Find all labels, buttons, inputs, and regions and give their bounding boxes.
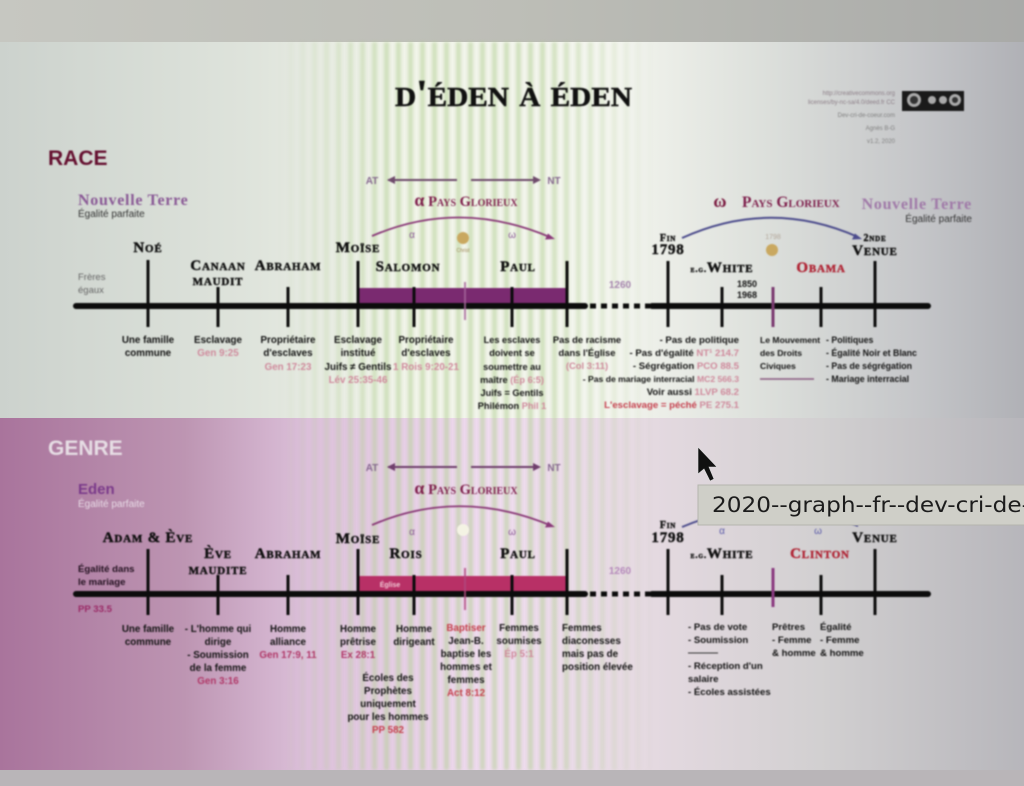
labels under timeline, left: soumises (496, 636, 542, 647)
labels under timeline, left (122, 334, 621, 411)
arrows: AT and NT: AT (366, 176, 378, 187)
labels under timeline, right (688, 621, 864, 698)
tooltip: 2020--graph--fr--dev-cri-de- (712, 493, 1024, 517)
timeline names: Paul (500, 546, 536, 562)
arc: alpha to omega: α (409, 230, 415, 241)
labels under timeline, right: des Droits (760, 348, 802, 358)
credits block: v1.2, 2020 (867, 139, 896, 145)
credits block: Dev-cri-de-coeur.com (838, 113, 895, 119)
labels under timeline, right: - Politiques (826, 335, 874, 345)
arc: alpha to omega (372, 217, 555, 241)
timeline names: maudite (189, 562, 247, 578)
labels under timeline, left: Une famille (122, 335, 175, 346)
timeline names: Moïse (336, 240, 380, 256)
labels under timeline, left: institué (341, 348, 376, 359)
timeline names: Adam & Ève (103, 529, 193, 546)
labels under timeline, left: Homme (396, 624, 433, 635)
note: frères égaux: Frères (78, 272, 106, 283)
labels under timeline, left: Gen 3:16 (197, 676, 239, 687)
labels under timeline, right: Le Mouvement (760, 335, 820, 345)
arrows: AT and NT (366, 463, 561, 474)
icon: mouse cursor (698, 447, 717, 481)
labels under timeline, left: pour les hommes (347, 712, 429, 723)
timeline names: Fin (660, 520, 676, 531)
labels under timeline, left: dirige (205, 637, 232, 648)
labels under timeline, right: - Pas de mariage interracial MC2 566.3 (583, 374, 739, 384)
timeline names: Abraham (255, 258, 321, 274)
timeline names: 1260 (609, 280, 632, 291)
timeline names: α (719, 526, 725, 537)
labels under timeline, left: Gen 17:9, 11 (259, 650, 317, 661)
icon: licence badge (902, 91, 964, 111)
labels under timeline, right: - Ségrégation PCO 88.5 (633, 361, 739, 372)
labels under timeline, right: - Femme (772, 635, 811, 646)
labels under timeline, right: L'esclavage = péché PE 275.1 (604, 400, 739, 411)
left goal: Nouvelle Terre: Égalité parfaite (78, 207, 145, 220)
labels under timeline, left: dans l'Église (559, 347, 615, 358)
right goal: Nouvelle Terre: Nouvelle Terre (862, 196, 972, 213)
labels under timeline, left: position élevée (562, 662, 633, 673)
timeline names: 2nde (864, 233, 886, 244)
labels under timeline, right: - Pas de politique (660, 335, 739, 346)
labels under timeline, left: soumettre au (483, 362, 541, 372)
labels under timeline, left: Lév 25:35-46 (329, 375, 388, 386)
left goal: Eden: Eden (78, 481, 115, 498)
heading: race: RACE (48, 147, 108, 170)
arc: alpha to omega (372, 506, 555, 538)
labels under timeline, left: Esclavage (334, 335, 383, 346)
labels under timeline, left: d'esclaves (263, 348, 313, 359)
labels under timeline, left: Ex 28:1 (341, 650, 376, 661)
credits block: http://creativecommons.org (823, 91, 895, 97)
labels under timeline, right: Égalité (820, 621, 851, 633)
icon: coin omega: 1798 (765, 234, 781, 241)
timeline names: 1798 (651, 242, 685, 258)
labels under timeline, left: mais pas de (562, 649, 619, 660)
heading: omega pays glorieux: Pays Glorieux (742, 194, 840, 211)
labels under timeline, right: - Pas de ségrégation (826, 361, 912, 371)
right goal: Nouvelle Terre (862, 196, 972, 225)
timeline names: Rois (390, 546, 422, 562)
labels under timeline, left: doivent se (489, 348, 535, 358)
main graphic (48, 73, 972, 736)
tooltip (698, 485, 1024, 525)
timeline names: 1798 (651, 530, 685, 546)
timeline names: Clinton (790, 546, 850, 562)
labels under timeline, left: commune (125, 637, 172, 648)
labels under timeline, right: - Écoles assistées (688, 686, 771, 698)
timeline names: Obama (796, 260, 846, 276)
timeline names: maudit (193, 273, 243, 289)
labels under timeline, right: Civiques (760, 361, 796, 371)
labels under timeline, right: Prêtres (772, 622, 805, 633)
arc: alpha to omega: ω (508, 230, 516, 241)
labels under timeline, left: - Soumission (187, 650, 249, 661)
labels under timeline, left: Homme (270, 624, 307, 635)
labels under timeline, left: commune (125, 348, 172, 359)
labels under timeline, left: Homme (340, 624, 377, 635)
labels under timeline, left: alliance (270, 637, 307, 648)
timeline names: 1260 (609, 566, 632, 577)
icon: coin (456, 232, 470, 254)
arrows: AT and NT: NT (547, 176, 561, 187)
timeline names: Fin (660, 233, 676, 244)
timeline (76, 260, 928, 327)
labels under timeline, left: Propriétaire (398, 335, 454, 346)
labels under timeline, left: Femmes (499, 623, 539, 634)
labels under timeline, right: & homme (772, 648, 816, 659)
labels under timeline, right: - Pas de vote (688, 622, 747, 633)
timeline names: Abraham (255, 546, 321, 562)
timeline names: Venue (852, 530, 898, 546)
labels under timeline, left: Esclavage (194, 335, 243, 346)
panel: genre (48, 437, 928, 736)
credits block: Agnès B-G (866, 126, 895, 132)
timeline names: 1968 (737, 290, 757, 300)
left goal: Eden: Égalité parfaite (78, 497, 145, 510)
heading: omega pays glorieux (713, 191, 840, 211)
labels under timeline, left: prêtrise (340, 637, 377, 648)
labels under timeline, right: - Soumission (688, 635, 748, 646)
timeline names: Noé (133, 240, 163, 256)
labels under timeline, left: Pas de racisme (553, 334, 621, 345)
icon: coin omega (765, 234, 781, 256)
labels under timeline, left: d'esclaves (401, 348, 451, 359)
arrows: AT and NT (366, 176, 561, 187)
timeline names (103, 520, 898, 578)
arc: omega period (682, 218, 862, 240)
labels under timeline, right: Voir aussi 1LVP 68.2 (647, 387, 739, 398)
labels under timeline, left: femmes (447, 675, 485, 686)
labels under timeline, right (583, 335, 917, 411)
timeline names: e.g.White (691, 260, 753, 276)
timeline names: 1850 (737, 279, 757, 289)
labels under timeline, left: Act 8:12 (447, 688, 486, 699)
credits block: licenses/by-nc-sa/4.0/deed.fr CC (808, 100, 896, 106)
credits block (808, 91, 896, 145)
note: frères égaux: égaux (78, 285, 104, 296)
heading: genre: GENRE (48, 437, 123, 460)
labels under timeline, left: Philémon Phil 1 (478, 401, 546, 411)
timeline names: Salomon (376, 259, 440, 275)
labels under timeline, left: uniquement (360, 699, 416, 710)
timeline (76, 549, 928, 615)
labels under timeline, left: Gen 17:23 (265, 362, 312, 373)
heading: alpha pays glorieux: α Pays Glorieux (414, 190, 518, 210)
left goal: Eden (78, 481, 145, 510)
bar: pays glorieux period: Église (380, 580, 400, 589)
labels under timeline, right: - Mariage interracial (826, 374, 909, 384)
labels under timeline, left: maître (Ép 6:5) (480, 375, 544, 385)
note: égalité dans le mariage: Égalité dans (78, 563, 135, 575)
timeline names: ω (814, 526, 822, 537)
timeline names: Moïse (336, 531, 380, 547)
arc: alpha to omega: α (409, 527, 415, 538)
labels under timeline, right: - Égalité Noir et Blanc (826, 348, 917, 358)
labels under timeline, left: Jean-B. (448, 636, 484, 647)
icon: coin: Christ (456, 248, 470, 254)
labels under timeline, left: Propriétaire (260, 335, 316, 346)
note: égalité dans le mariage: le mariage (78, 577, 125, 588)
left goal: Nouvelle Terre: Nouvelle Terre (78, 192, 188, 209)
labels under timeline, right: salaire (688, 674, 718, 685)
left goal: Nouvelle Terre (78, 192, 188, 220)
labels under timeline, left: Une famille (122, 624, 175, 635)
labels under timeline, left: (Col 3:11) (566, 360, 608, 371)
labels under timeline, right: & homme (820, 648, 864, 659)
labels under timeline, left: PP 582 (372, 725, 405, 736)
labels under timeline, left: Baptiser (446, 623, 486, 634)
labels under timeline, left: 1 Rois 9:20-21 (393, 362, 459, 373)
heading: alpha pays glorieux: α Pays Glorieux (414, 478, 518, 498)
labels under timeline, left: Écoles des (362, 672, 414, 684)
labels under timeline, left: diaconesses (562, 636, 621, 647)
note: égalité dans le mariage: PP 33.5 (78, 604, 113, 615)
labels under timeline, left: Gen 9:25 (197, 348, 239, 359)
timeline names: e.g.White (691, 546, 753, 562)
labels under timeline, left: - L'homme qui (185, 624, 252, 635)
labels under timeline, right: - Réception d'un (688, 661, 763, 672)
arc: omega period, mostly hidden (682, 508, 858, 527)
labels under timeline, left: dirigeant (393, 637, 435, 648)
arc: alpha to omega: ω (508, 527, 516, 538)
heading: omega pays glorieux: ω (713, 191, 727, 211)
arrows: AT and NT: AT (366, 463, 378, 474)
labels under timeline, right: - Femme (820, 635, 859, 646)
labels under timeline, right: - Pas d'égalité NT¹ 214.7 (630, 348, 739, 359)
bar: pays glorieux period (358, 288, 567, 305)
bar: pays glorieux period (358, 576, 567, 592)
timeline names: Ève (204, 545, 232, 562)
labels under timeline, left (122, 623, 633, 736)
labels under timeline, left: baptise les (441, 649, 492, 660)
icon: coin glow (457, 524, 469, 536)
labels under timeline, left: Femmes (562, 623, 602, 634)
title: d'éden à éden (395, 73, 633, 115)
right goal: Nouvelle Terre: Égalité parfaite (905, 212, 972, 225)
labels under timeline, left: Les esclaves (484, 335, 540, 345)
labels under timeline, left: Ép 5:1 (504, 648, 534, 660)
labels under timeline, left: Juifs ≠ Gentils (325, 362, 392, 373)
timeline names: Canaan (190, 258, 246, 274)
timeline names: Paul (500, 259, 536, 275)
arrows: AT and NT: NT (547, 463, 561, 474)
labels under timeline, left: Prophètes (364, 686, 412, 697)
labels under timeline, left: Juifs = Gentils (480, 388, 544, 398)
labels under timeline, left: hommes et (440, 662, 493, 673)
panel: race (48, 147, 972, 411)
timeline names: Venue (852, 243, 898, 259)
labels under timeline, left: de la femme (190, 663, 247, 674)
timeline names (133, 233, 898, 300)
